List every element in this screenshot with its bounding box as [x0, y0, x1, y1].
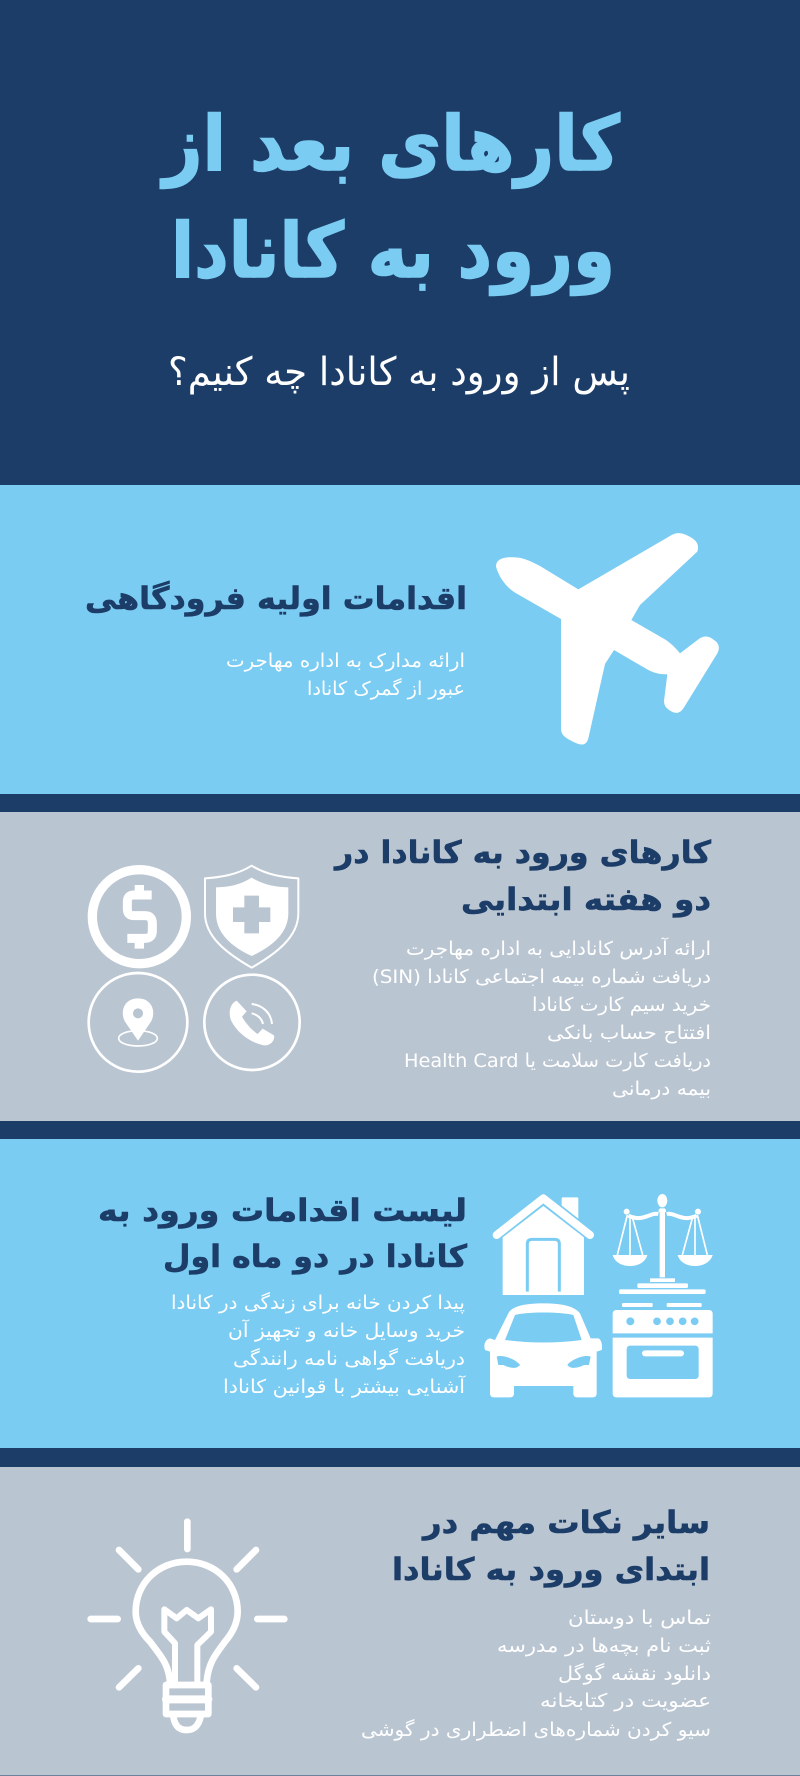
heading: other tips: سایر نکات مهم در [421, 1505, 710, 1541]
text: airport list [226, 650, 465, 700]
icon: location pin [89, 973, 187, 1072]
heading: first two weeks: دو هفته ابتدایی [461, 882, 711, 918]
heading: first two months: لیست اقدامات ورود به [98, 1193, 467, 1229]
text: first two weeks list: افتتاح حساب بانکی [547, 1022, 711, 1044]
panel: airport steps [0, 485, 800, 794]
icon: house [497, 1197, 590, 1295]
icon: light bulb [91, 1522, 284, 1730]
heading: other tips [392, 1505, 710, 1588]
heading: first two months [98, 1193, 468, 1275]
text: other tips list: ثبت نام بچه‌ها در مدرسه [497, 1635, 711, 1657]
text: first two weeks list [372, 936, 711, 1100]
title: ورود به کانادا [171, 206, 615, 296]
heading: airport: اقدامات اولیه فرودگاهی [85, 580, 467, 617]
panel: other tips [0, 1467, 800, 1776]
text: first two months list: خرید وسایل خانه و تجهیز آن [228, 1318, 465, 1342]
text: other tips list: سیو کردن شماره‌های اضطراری در گوشی [361, 1718, 711, 1741]
text: first two months list [171, 1291, 466, 1398]
text: first two weeks list: بیمه درمانی [612, 1078, 711, 1100]
icon: airplane [496, 533, 719, 745]
subtitle: پس از ورود به کانادا چه کنیم؟ [168, 350, 630, 395]
text: other tips list: تماس با دوستان [568, 1607, 711, 1629]
title: کارهای بعد از [159, 99, 621, 189]
text: other tips list: دانلود نقشه گوگل [558, 1662, 711, 1685]
heading: first two weeks: کارهای ورود به کانادا در [333, 835, 712, 871]
icon: dollar coin [92, 870, 186, 964]
text: first two weeks list: دریافت کارت سلامت یا Health Card [404, 1050, 711, 1072]
text: first two weeks list: دریافت شماره بیمه اجتماعی کانادا (SIN) [372, 966, 711, 988]
icon: phone [204, 975, 300, 1070]
text: first two months list: پیدا کردن خانه برای زندگی در کانادا [171, 1291, 465, 1314]
panel: first two months [0, 1139, 800, 1448]
icon: stove [613, 1303, 713, 1397]
icon: scales of justice [613, 1194, 713, 1294]
title [159, 99, 621, 296]
icon: health shield [205, 866, 298, 968]
heading: first two months: کانادا در دو ماه اول [163, 1239, 468, 1275]
text: other tips list: عضویت در کتابخانه [540, 1690, 711, 1712]
text: first two months list: دریافت گواهی نامه رانندگی [233, 1347, 465, 1370]
icon: settling-in group [484, 1194, 713, 1397]
text: airport list: عبور از گمرک کانادا [307, 677, 465, 700]
panel: first two weeks [0, 812, 800, 1121]
icon: car [484, 1303, 602, 1397]
text: other tips list [361, 1607, 711, 1741]
heading: first two weeks [333, 835, 712, 918]
text: first two weeks list: خرید سیم کارت کانادا [532, 994, 711, 1016]
text: airport list: ارائه مدارک به اداره مهاجرت [226, 650, 465, 672]
heading: other tips: ابتدای ورود به کانادا [392, 1552, 710, 1588]
text: first two months list: آشنایی بیشتر با قوانین کانادا [223, 1374, 466, 1398]
icon: services group [89, 866, 300, 1072]
text: first two weeks list: ارائه آدرس کانادایی به اداره مهاجرت [406, 936, 711, 960]
panel: header [0, 0, 800, 485]
